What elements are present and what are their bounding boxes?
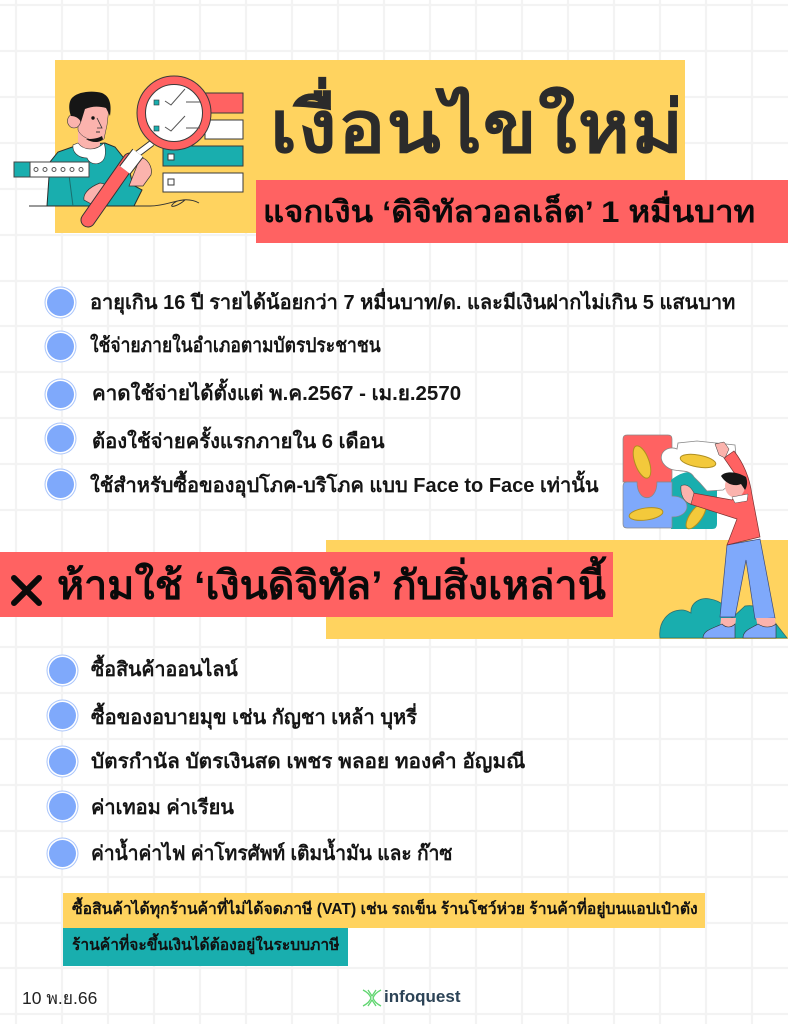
text: prohibited 5: ค่าน้ำค่าไฟ ค่าโทรศัพท์ เติมน้ำมัน และ ก๊าซ [91,843,452,865]
heading: subtitle: แจกเงิน ‘ดิจิทัลวอลเล็ต’ 1 หมื่นบาท [263,196,755,229]
note: teal callout [63,928,348,966]
logo: infoquest: infoquest [384,987,460,1006]
bullet 3 [49,748,76,775]
text: prohibited 1: ซื้อสินค้าออนไลน์ [91,659,238,681]
heading: prohibition title: ห้ามใช้ ‘เงินดิจิทัล’ กับสิ่งเหล่านี้ [57,564,606,608]
heading: main title: เงื่อนไขใหม่ [270,88,684,168]
bullet 3 [47,381,74,408]
note: yellow callout [63,893,705,928]
text: prohibited 4: ค่าเทอม ค่าเรียน [91,797,234,819]
bullet 2 [47,333,74,360]
panel: prohibition red banner [0,552,613,617]
text: condition 4: ต้องใช้จ่ายครั้งแรกภายใน 6 เดือน [92,431,385,453]
bullet 5 [49,840,76,867]
text: date: 10 พ.ย.66 [22,988,97,1008]
panel: header yellow background [55,60,685,233]
list: conditions [44,286,735,500]
icon: man assembling puzzle with coins [622,434,788,638]
text: condition 2: ใช้จ่ายภายในอำเภอตามบัตรประชาชน [90,335,381,357]
text: prohibited 2: ซื้อของอบายมุข เช่น กัญชา เหล้า บุหรี่ [91,707,417,729]
bullet 2 [49,702,76,729]
icon: cross mark [11,575,42,606]
note: yellow callout: ซื้อสินค้าได้ทุกร้านค้าที่ไม่ได้จดภาษี (VAT) เช่น รถเข็น ร้านโชว์ห่วย ร้านค้าที่อยู่บนแอปเป๋าตัง [72,901,698,918]
note: teal callout: ร้านค้าที่จะขึ้นเงินได้ต้องอยู่ในระบบภาษี [72,937,339,954]
text: condition 3: คาดใช้จ่ายได้ตั้งแต่ พ.ค.2567 - เม.ย.2570 [92,383,461,405]
text: prohibited 3: บัตรกำนัล บัตรเงินสด เพชร พลอย ทองคำ อัญมณี [91,751,525,773]
bullet 4 [49,793,76,820]
bullet 4 [47,425,74,452]
text: condition 1: อายุเกิน 16 ปี รายได้น้อยกว่า 7 หมื่นบาท/ด. และมีเงินฝากไม่เกิน 5 แสนบาท [90,292,735,314]
bullet 1 [49,657,76,684]
bullet 1 [47,289,74,316]
bullet 5 [47,471,74,498]
panel: prohibition yellow background [326,540,788,639]
list: prohibited items [46,654,525,870]
icon: man with magnifying glass and checklist [14,76,244,228]
panel: header red subtitle banner [256,180,788,243]
text: condition 5: ใช้สำหรับซื้อของอุปโภค-บริโภค แบบ Face to Face เท่านั้น [90,475,599,497]
